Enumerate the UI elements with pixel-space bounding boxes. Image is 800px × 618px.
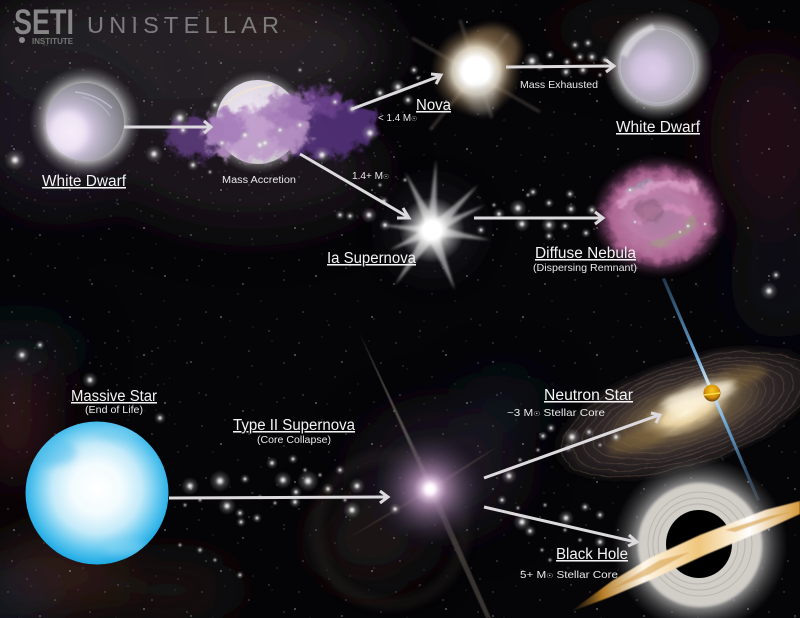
- label: Core Collapse: (Core Collapse): [257, 434, 331, 446]
- label: Mass Exhausted: Mass Exhausted: [520, 79, 598, 91]
- arrow: accretion to Ia supernova: [300, 154, 409, 218]
- star cluster: neutron star and black hole arrows: [497, 270, 781, 563]
- arrow: nova to white dwarf: [506, 60, 614, 72]
- label: Ia Supernova: Ia Supernova: [327, 250, 416, 267]
- logo: SETI Institute and Unistellar: [14, 3, 279, 46]
- label: 5+ solar mass stellar core: 5+ M ☉ Stellar Core: [520, 569, 618, 581]
- diffuse nebula remnant: [597, 161, 721, 271]
- label: 3 solar mass stellar core: ~3 M ☉ Stellar Core: [507, 407, 605, 419]
- arrow: Ia supernova to nebula: [474, 212, 603, 224]
- label: Type II Supernova: Type II Supernova: [233, 417, 355, 434]
- arrow: massive star to Type II supernova: [169, 491, 388, 503]
- label: Nova: Nova: [416, 97, 451, 114]
- massive star: [26, 422, 168, 564]
- label: Neutron Star: Neutron Star: [544, 387, 633, 404]
- label: White Dwarf: White Dwarf: [42, 173, 127, 190]
- star cluster: Type II supernova arrow: [14, 340, 401, 579]
- nova burst: [412, 20, 540, 130]
- label: White Dwarf second: White Dwarf: [616, 119, 701, 136]
- label: Massive Star: Massive Star: [71, 388, 157, 405]
- accretion disk: [570, 501, 800, 612]
- logo: Unistellar wordmark: UNISTELLAR: [87, 12, 279, 38]
- arrow: white dwarf to mass accretion: [124, 121, 211, 133]
- logo: SETI wordmark: SETI: [14, 3, 74, 42]
- mass accretion star with purple cloud: [166, 70, 376, 174]
- neutron star core: [704, 384, 720, 402]
- Type II supernova: [316, 330, 500, 618]
- label: Mass Accretion: Mass Accretion: [222, 174, 296, 186]
- label: Black Hole: Black Hole: [556, 546, 628, 563]
- white dwarf, start of binary path: [29, 66, 141, 178]
- Ia supernova star: [380, 160, 490, 290]
- swirling disk: [533, 314, 800, 512]
- pulsar jet: [662, 278, 760, 501]
- logo: SETI wordmark: INSTITUTE: [32, 37, 74, 46]
- label: End of Life: (End of Life): [85, 404, 143, 416]
- star cluster: accretion region: [4, 65, 421, 175]
- event horizon: [666, 510, 732, 578]
- arrow: supernova to black hole: [484, 507, 637, 546]
- label: 1.4+ solar masses: 1.4+ M☉: [352, 170, 389, 182]
- black hole: [570, 457, 800, 618]
- neutron star with accretion disk and jets: [533, 278, 800, 512]
- white dwarf, after nova: [603, 11, 713, 121]
- purple accreting gas cloud: [166, 89, 376, 159]
- label: less than 1.4 solar masses: < 1.4 M☉: [378, 112, 417, 124]
- star cluster: Ia supernova surroundings: [335, 177, 598, 241]
- label: Diffuse Nebula: Diffuse Nebula: [535, 245, 636, 262]
- arrow: supernova to neutron star: [484, 413, 660, 478]
- star cluster: nova to white dwarf: [523, 38, 610, 78]
- label: Dispersing Remnant: (Dispersing Remnant): [533, 262, 637, 274]
- arrow: accretion to nova: [352, 74, 441, 109]
